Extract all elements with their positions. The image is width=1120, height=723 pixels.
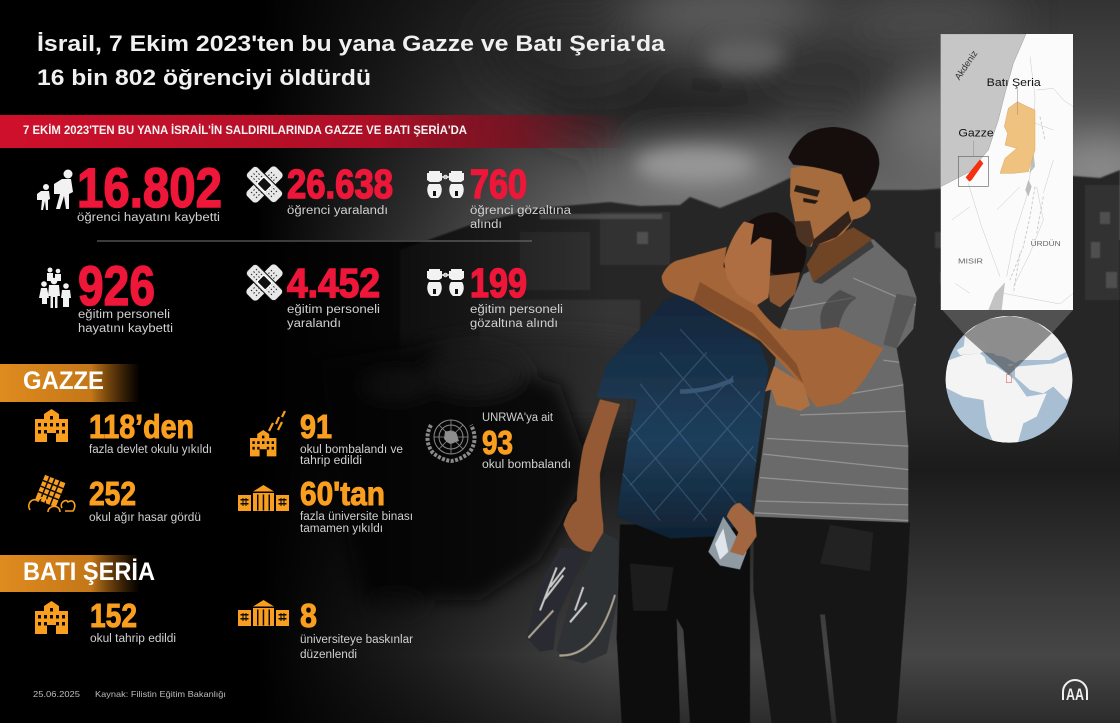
shoes bbox=[527, 532, 618, 663]
icon: university bbox=[238, 600, 289, 626]
icon: school under missiles bbox=[250, 411, 285, 456]
boy: head bbox=[747, 212, 807, 307]
footer: date and source bbox=[33, 689, 226, 699]
man: arms bbox=[662, 247, 883, 407]
Gaza box bbox=[958, 156, 988, 186]
stat: students wounded: 26.638 bbox=[287, 161, 393, 207]
zoom beam bbox=[942, 310, 1073, 375]
stat: students killed: öğrenci hayatını kaybetti bbox=[77, 212, 220, 224]
icon: school bbox=[35, 409, 68, 442]
title bbox=[37, 31, 666, 90]
stat: university buildings destroyed: tamamen yıkıldı bbox=[300, 523, 383, 535]
stat: staff killed bbox=[39, 254, 173, 335]
map panel: Batı Şeria bbox=[987, 77, 1042, 89]
stat: university buildings destroyed: fazla üniversite binası bbox=[300, 511, 413, 523]
stat: staff wounded: 4.452 bbox=[287, 260, 380, 306]
stat: university raids: düzenlendi bbox=[300, 649, 357, 661]
icon: bandage bbox=[245, 165, 284, 204]
stat: students killed: 16.802 bbox=[77, 156, 222, 219]
stat: university raids bbox=[238, 597, 413, 661]
boy: shirt bbox=[597, 294, 768, 538]
stat: schools bombed: tahrip edildi bbox=[300, 455, 362, 467]
stat: staff detained: gözaltına alındı bbox=[470, 318, 558, 330]
icon: university bbox=[238, 485, 289, 511]
blurred figure in background bbox=[320, 345, 590, 614]
icon: UN emblem bbox=[427, 420, 475, 461]
West Bank bbox=[1000, 102, 1035, 173]
title: 16 bin 802 öğrenciyi öldürdü bbox=[37, 65, 371, 90]
footer: date and source: Kaynak: Filistin Eğitim Bakanlığı bbox=[95, 689, 226, 699]
water bottle bbox=[708, 517, 747, 569]
stat: state schools destroyed bbox=[35, 408, 212, 456]
stat: university raids: üniversiteye baskınlar bbox=[300, 634, 413, 646]
boy: hand with bottle bbox=[727, 503, 757, 556]
locator map bbox=[940, 34, 1077, 450]
logo: AA bbox=[1063, 680, 1087, 704]
Gaza Strip bbox=[966, 159, 983, 182]
stat: schools bombed bbox=[250, 408, 403, 467]
stat: students detained: öğrenci gözaltına bbox=[470, 205, 572, 217]
globe inset bbox=[946, 316, 1072, 443]
icon: school bbox=[35, 601, 68, 634]
stat: UNRWA schools: UNRWA'ya ait bbox=[482, 412, 554, 424]
stat: state schools destroyed: 118’den bbox=[89, 408, 194, 445]
stat: students detained: 760 bbox=[470, 161, 527, 207]
icon: bandage bbox=[245, 263, 284, 302]
stat: staff wounded: yaralandı bbox=[287, 318, 341, 330]
map panel bbox=[941, 34, 1073, 310]
stat: heavily damaged schools: 252 bbox=[89, 475, 136, 512]
stat: UNRWA schools bbox=[427, 412, 571, 471]
stat: UNRWA schools: okul bombalandı bbox=[482, 459, 571, 471]
stat: West Bank schools: 152 bbox=[90, 597, 137, 634]
stat: staff killed: eğitim personeli bbox=[78, 309, 170, 321]
stat: university buildings destroyed: 60'tan bbox=[300, 475, 385, 512]
stat: staff detained: eğitim personeli bbox=[470, 304, 563, 316]
stat: heavily damaged schools: okul ağır hasar gördü bbox=[89, 512, 201, 524]
stat: students killed bbox=[37, 156, 222, 224]
stat: students wounded bbox=[245, 161, 393, 217]
stat: schools bombed: 91 bbox=[300, 408, 332, 445]
stat: staff wounded: eğitim personeli bbox=[287, 304, 380, 316]
photo: two boys embracing bbox=[527, 127, 917, 723]
map panel: Akdeniz bbox=[953, 48, 980, 82]
boy: trousers bbox=[617, 524, 750, 723]
stat: UNRWA schools: 93 bbox=[482, 424, 513, 461]
icon: handcuffs bbox=[427, 269, 464, 296]
Dead Sea and gulf bbox=[1025, 152, 1035, 197]
icon: handcuffs bbox=[427, 171, 464, 198]
boy: arm bbox=[563, 399, 620, 556]
stat: staff detained: 199 bbox=[470, 260, 527, 306]
section heading: Batı Şeria bbox=[0, 555, 155, 592]
stat: staff detained bbox=[427, 260, 563, 330]
stat: West Bank schools: okul tahrip edildi bbox=[90, 633, 176, 645]
icon: collapsing building bbox=[29, 475, 75, 512]
sea bbox=[941, 34, 1026, 187]
stat: students wounded: öğrenci yaralandı bbox=[287, 205, 388, 217]
man: shirt bbox=[753, 239, 917, 523]
terrain and borders bbox=[952, 57, 1073, 304]
title: İsrail, 7 Ekim 2023'ten bu yana Gazze ve Batı Şeria'da bbox=[37, 31, 666, 56]
stat: West Bank schools bbox=[35, 597, 176, 645]
stat: students detained: alındı bbox=[470, 219, 502, 231]
stat: heavily damaged schools bbox=[29, 475, 201, 524]
icon: staff group bbox=[39, 268, 71, 308]
stat: state schools destroyed: fazla devlet okulu yıkıldı bbox=[89, 444, 212, 456]
stat: staff wounded bbox=[245, 260, 380, 330]
section heading: Gazze bbox=[0, 364, 140, 402]
section heading: Batı Şeria: BATI ŞERİA bbox=[23, 558, 155, 586]
logo: AA: AA bbox=[1066, 685, 1084, 704]
red banner bbox=[0, 115, 630, 148]
man: fingers bbox=[765, 366, 810, 411]
stat: staff killed: 926 bbox=[78, 254, 155, 317]
map panel: ÜRDÜN bbox=[1031, 239, 1061, 248]
section heading: Gazze: GAZZE bbox=[23, 367, 104, 395]
map panel: Gazze bbox=[958, 128, 994, 140]
stat: university buildings destroyed bbox=[238, 475, 413, 535]
stat: staff killed: hayatını kaybetti bbox=[78, 323, 173, 335]
man: hair bbox=[788, 127, 879, 202]
man: hand on head bbox=[724, 221, 772, 306]
icon: students bbox=[37, 170, 73, 210]
man: trousers bbox=[753, 517, 910, 723]
stat: schools bombed: okul bombalandı ve bbox=[300, 444, 403, 456]
footer: date and source: 25.06.2025 bbox=[33, 689, 80, 699]
ruined city skyline bbox=[400, 170, 1120, 520]
man: neck and face bbox=[790, 165, 873, 282]
stat: students detained bbox=[427, 161, 572, 231]
map panel: MISIR bbox=[958, 256, 984, 265]
stat: university raids: 8 bbox=[300, 597, 317, 634]
red banner: 7 EKİM 2023'TEN BU YANA İSRAİL'İN SALDIRILARINDA GAZZE VE BATI ŞERİA'DA bbox=[23, 124, 467, 137]
